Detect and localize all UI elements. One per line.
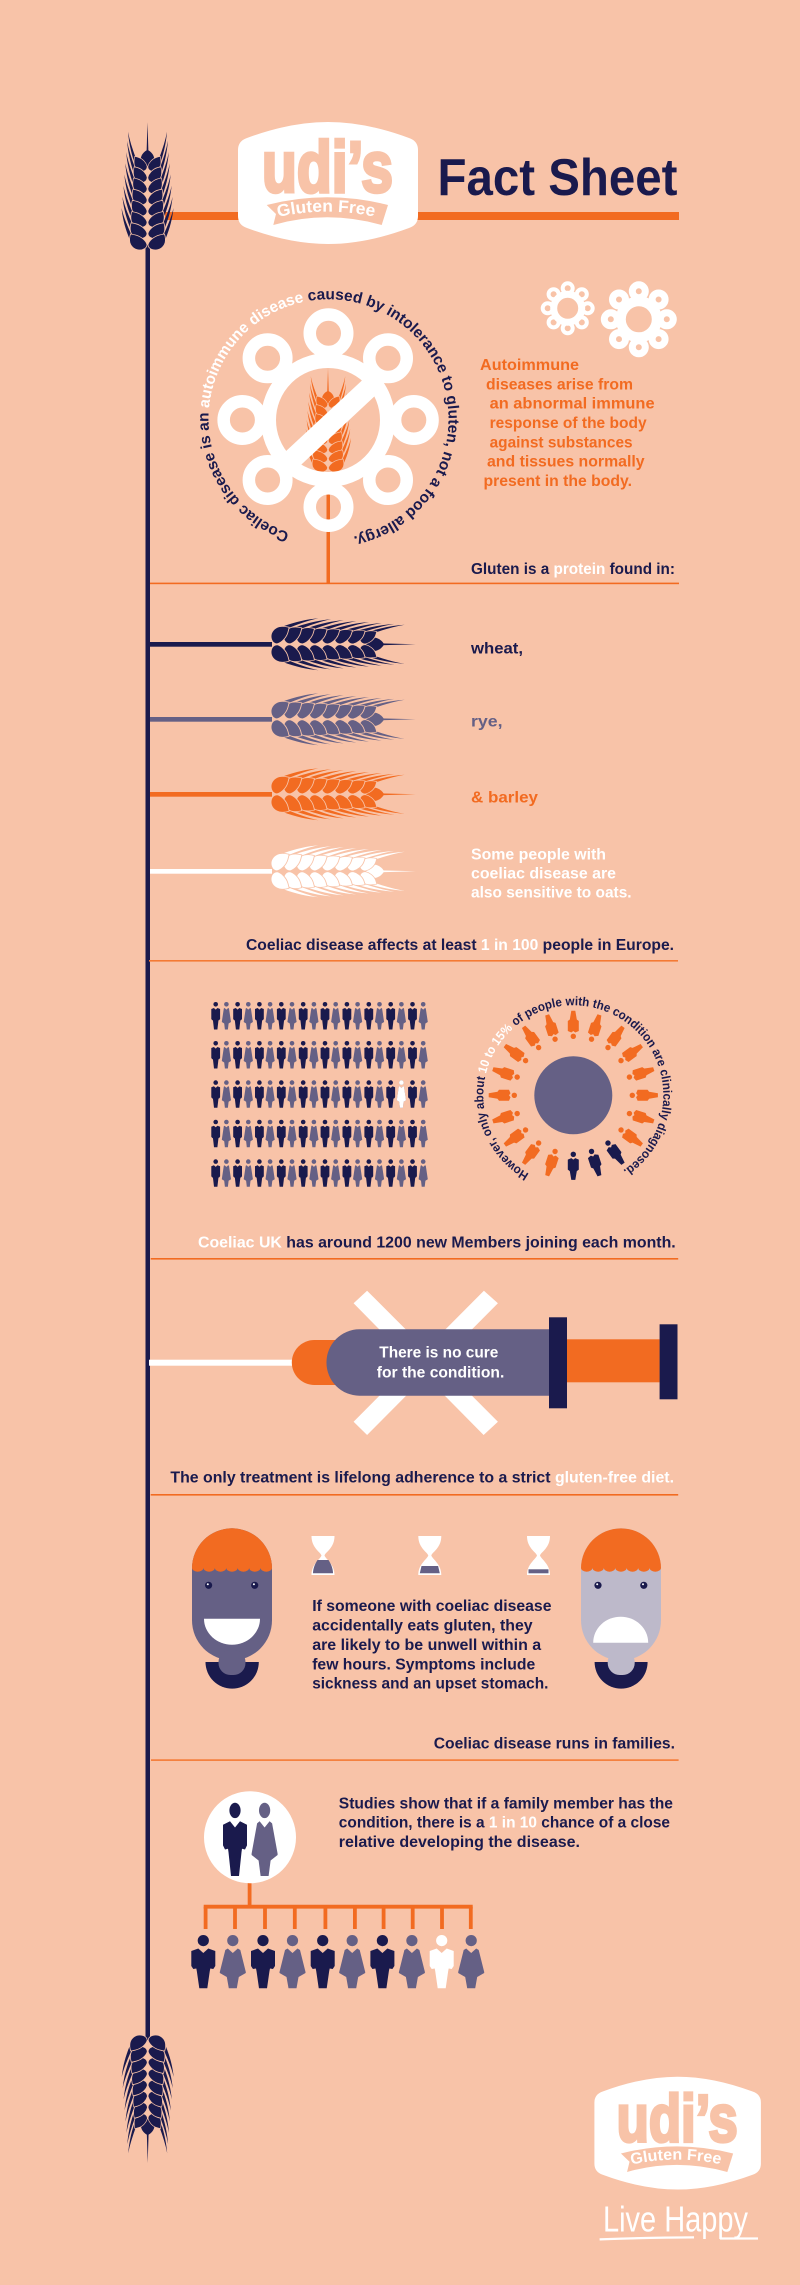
header orange rule bbox=[165, 212, 679, 220]
text: family risk: condition, there is a 1 in 10 chance of a close bbox=[339, 1815, 670, 1832]
text: autoimmune explanation: and tissues normally bbox=[487, 454, 645, 471]
text: family risk bbox=[339, 1795, 673, 1851]
parents in circle bbox=[204, 1791, 296, 1883]
label: barley: & barley bbox=[471, 789, 538, 806]
family tree connector bbox=[204, 1883, 473, 1929]
icon: hourglass low bbox=[527, 1536, 550, 1575]
heading: 1 in 100: Coeliac disease affects at least 1 in 100 people in Europe. bbox=[246, 937, 674, 954]
heading: gluten is a protein: Gluten is a protein found in: bbox=[471, 561, 675, 578]
divider bbox=[150, 583, 679, 584]
text: autoimmune explanation: present in the body. bbox=[484, 473, 632, 490]
text: accidental gluten symptoms: If someone with coeliac disease bbox=[312, 1598, 552, 1615]
label: oats sensitivity bbox=[471, 846, 632, 902]
text: accidental gluten symptoms: are likely to be unwell within a bbox=[312, 1637, 541, 1654]
divider bbox=[151, 1759, 679, 1761]
label: oats sensitivity: Some people with bbox=[471, 846, 606, 863]
text: accidental gluten symptoms: few hours. Symptoms include bbox=[312, 1656, 535, 1673]
divider bbox=[151, 1494, 678, 1496]
heading: only treatment: The only treatment is lifelong adherence to a strict gluten-free diet. bbox=[170, 1470, 674, 1487]
text: accidental gluten symptoms: accidentally eats gluten, they bbox=[312, 1617, 533, 1634]
icon: bottom wheat ear bbox=[122, 2035, 174, 2163]
icon: small immune cell bbox=[543, 283, 593, 333]
disc: diagnosed population bbox=[534, 1056, 612, 1134]
pictogram: 1 in 100 people bbox=[211, 1002, 428, 1187]
wheat row: rye bbox=[150, 693, 416, 745]
logo: udi's gluten free header bbox=[238, 122, 418, 244]
label: rye: rye, bbox=[471, 714, 503, 731]
text: no cure: There is no cure bbox=[379, 1345, 498, 1362]
text: autoimmune explanation bbox=[480, 357, 655, 490]
logo: udi's gluten free footer: Gluten Free bbox=[630, 2149, 721, 2164]
row of ten relatives bbox=[191, 1935, 484, 1988]
divider bbox=[149, 960, 678, 962]
wheat row: barley bbox=[150, 768, 416, 820]
icon: top wheat ear bbox=[122, 122, 174, 250]
logo: udi's gluten free footer bbox=[594, 2076, 761, 2190]
heading: runs in families: Coeliac disease runs in families. bbox=[434, 1735, 675, 1752]
label: oats sensitivity: coeliac disease are bbox=[471, 865, 616, 882]
text: accidental gluten symptoms bbox=[312, 1598, 552, 1693]
logo: udi's gluten free header: udi’s bbox=[262, 128, 393, 208]
divider bbox=[151, 1258, 678, 1260]
text: accidental gluten symptoms: sickness and an upset stomach. bbox=[312, 1676, 548, 1693]
icon: white cross bbox=[354, 1291, 498, 1435]
label: oats sensitivity: also sensitive to oats. bbox=[471, 885, 632, 902]
wheat row: wheat bbox=[150, 618, 416, 670]
text: autoimmune explanation: diseases arise from bbox=[486, 376, 633, 393]
text: no cure: for the condition. bbox=[377, 1364, 504, 1381]
icon: virus with crossed out wheat bbox=[224, 315, 433, 526]
wheat row: oats bbox=[150, 845, 416, 897]
icon: syringe bbox=[149, 1317, 678, 1408]
icon: happy face bbox=[192, 1528, 272, 1689]
icon: large immune cell bbox=[604, 285, 673, 354]
tagline: live happy: Live Happy bbox=[603, 2199, 748, 2240]
text: family risk: Studies show that if a family member has the bbox=[339, 1795, 673, 1812]
connector from virus to divider bbox=[326, 493, 330, 583]
circular text: clinically diagnosed: However, only about 10 to 15% of people with the condition are clinically diagnosed. bbox=[474, 996, 672, 1181]
text: autoimmune explanation: response of the body bbox=[490, 415, 647, 432]
icon: hourglass full bbox=[312, 1536, 334, 1575]
text: family risk: relative developing the disease. bbox=[339, 1834, 580, 1851]
text: autoimmune explanation: against substances bbox=[490, 434, 633, 451]
circular text: coeliac definition: Coeliac disease is an autoimmune disease caused by intolerance to gluten, not a food allergy. bbox=[200, 291, 460, 544]
text: no cure bbox=[377, 1345, 504, 1381]
main stem bbox=[146, 245, 150, 2040]
label: wheat: wheat, bbox=[470, 640, 523, 657]
logo: udi's gluten free footer: udi’s bbox=[617, 2082, 738, 2156]
icon: unwell face bbox=[581, 1528, 661, 1689]
ring of people: 3 in 20 diagnosed bbox=[489, 1011, 658, 1180]
text: autoimmune explanation: Autoimmune bbox=[480, 357, 579, 374]
heading: coeliac uk: Coeliac UK has around 1200 new Members joining each month. bbox=[198, 1235, 676, 1252]
logo: udi's gluten free header: Gluten Free bbox=[277, 200, 374, 216]
title: Fact Sheet bbox=[438, 149, 678, 207]
text: autoimmune explanation: an abnormal immune bbox=[490, 396, 655, 413]
icon: hourglass half bbox=[418, 1536, 441, 1575]
